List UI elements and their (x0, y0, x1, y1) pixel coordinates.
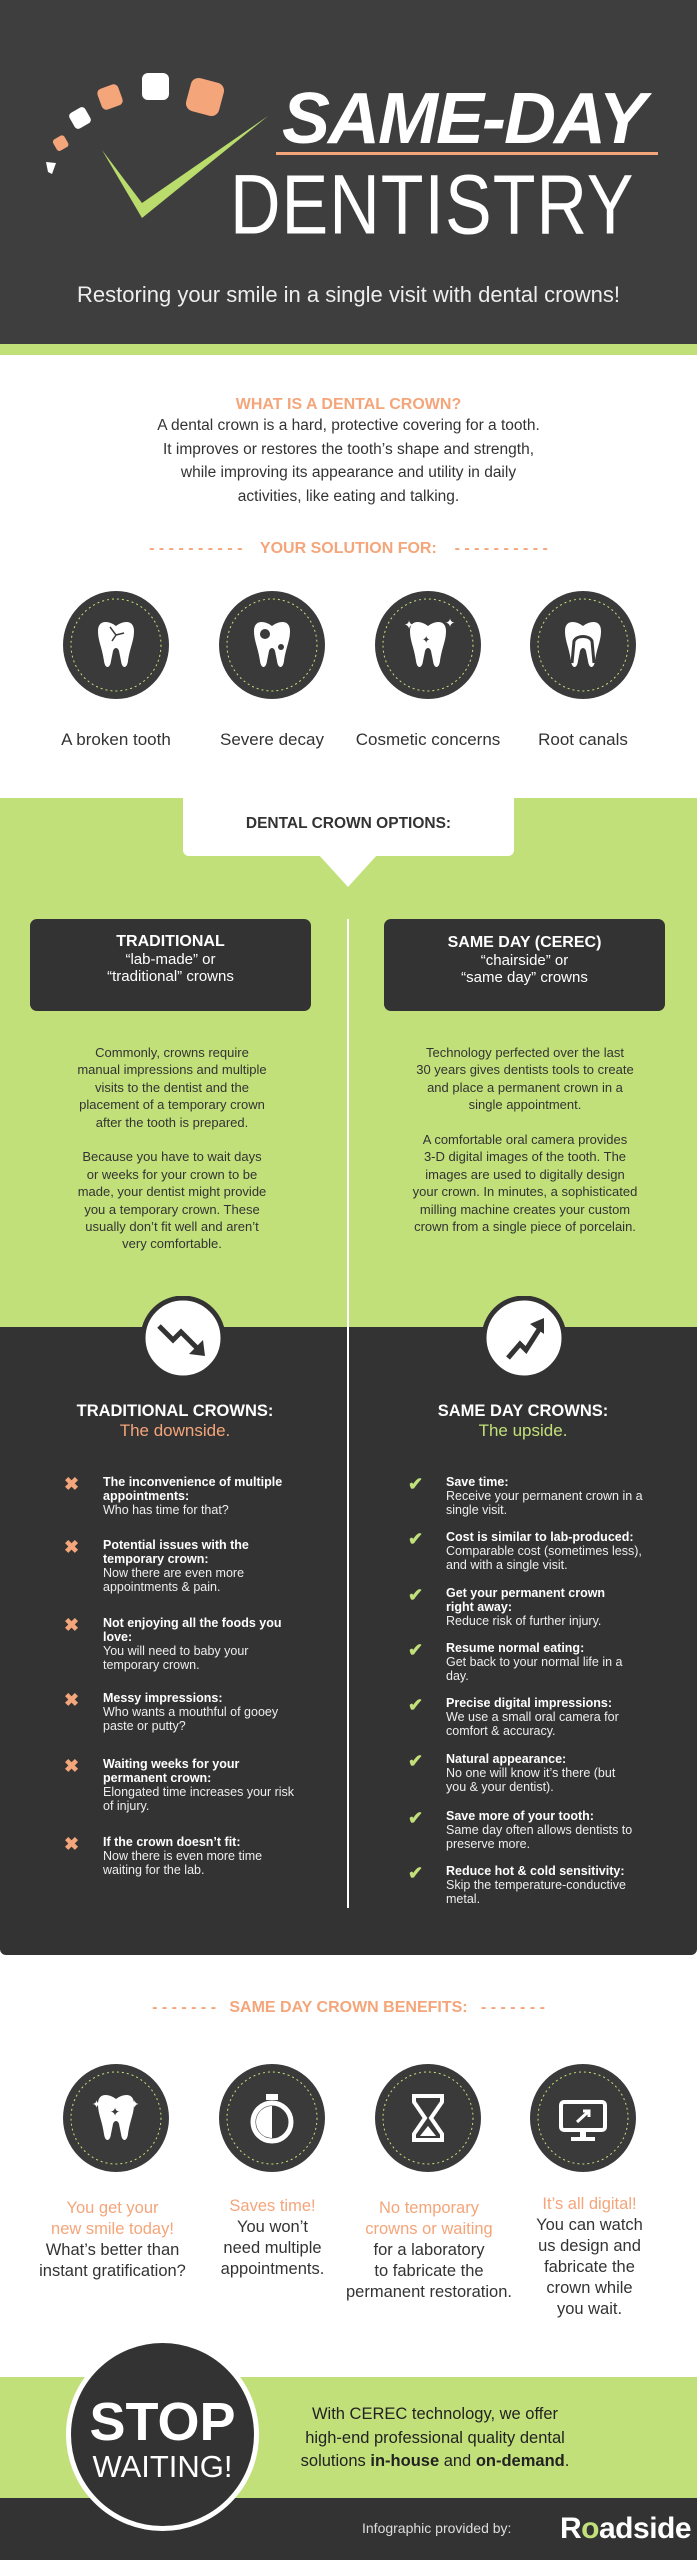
section: dental crown options (0, 798, 697, 1328)
list: downsides: ✖ (64, 1756, 79, 1776)
list: downsides: ✖ (64, 1537, 79, 1557)
what is a dental crown: activities, like eating and talking. (238, 488, 459, 504)
icon: shiny tooth (63, 2064, 169, 2172)
what is a dental crown: WHAT IS A DENTAL CROWN? (236, 396, 461, 413)
text: traditional: visits to the dentist and the (95, 1080, 249, 1095)
list: downsides: You will need to baby your temporary crown. (103, 1644, 248, 1672)
title: DENTISTRY (230, 158, 634, 252)
what is a dental crown: It improves or restores the tooth’s shape and strength, (163, 440, 534, 458)
list: upsides: Save more of your tooth: (446, 1809, 594, 1823)
icon: cosmetic: ✦ (422, 635, 430, 646)
list: upsides: ✔ (408, 1808, 423, 1828)
header (0, 0, 697, 344)
list: upsides: Get your permanent crown right away: (446, 1586, 605, 1614)
list: downsides: Messy impressions: (103, 1691, 222, 1705)
text: traditional: placement of a temporary crown (79, 1097, 265, 1112)
heading: benefits: - - - - - - - SAME DAY CROWN BENEFITS: - - - - - - - (152, 1999, 545, 2016)
text: traditional: made, your dentist might provide (78, 1184, 266, 1199)
text: traditional: very comfortable. (122, 1236, 222, 1251)
what is a dental crown (157, 396, 540, 504)
solution labels: A broken tooth (61, 730, 171, 749)
logo: roadside: Roadside (560, 2512, 691, 2545)
list: upsides: We use a small oral camera for comfort & accuracy. (446, 1710, 619, 1738)
text: same day: images are used to digitally design (425, 1167, 625, 1182)
heading: same day crowns: The upside. (479, 1421, 567, 1440)
list: upsides: Reduce hot & cold sensitivity: (446, 1864, 625, 1878)
icon: monitor (530, 2064, 636, 2172)
text: same day: 30 years gives dentists tools to create (416, 1062, 634, 1077)
text: traditional (77, 1045, 267, 1251)
benefit texts: What’s better than (46, 2241, 179, 2259)
callout: DENTAL CROWN OPTIONS: (246, 815, 451, 832)
benefit texts: appointments. (221, 2260, 324, 2278)
icon: hourglass (375, 2064, 481, 2172)
benefit texts: need multiple (223, 2239, 322, 2257)
panel: same day: “same day” crowns (461, 969, 588, 986)
benefit texts: for a laboratory (374, 2241, 484, 2259)
panel: traditional (30, 919, 311, 1011)
banner: stop waiting: high-end professional quality dental (305, 2428, 565, 2446)
list: upsides: Comparable cost (sometimes less), and with a single visit. (446, 1544, 642, 1572)
benefit icons (63, 2064, 636, 2172)
solution icons (63, 591, 636, 699)
icon: cosmetic (375, 591, 481, 699)
solution labels: Severe decay (220, 730, 324, 749)
title: SAME-DAY (282, 79, 645, 159)
text: same day: A comfortable oral camera provides (423, 1132, 627, 1147)
benefit texts: us design and (538, 2237, 641, 2255)
icon: decay (219, 591, 325, 699)
text: traditional: Because you have to wait days (82, 1149, 262, 1164)
callout (183, 798, 514, 856)
banner: stop waiting (0, 2377, 697, 2498)
icon: root canal (530, 591, 636, 699)
list: upsides: ✔ (408, 1529, 423, 1549)
benefit texts: fabricate the (544, 2258, 635, 2276)
icon: shiny tooth: ✦ (130, 2099, 139, 2111)
text: same day: 3-D digital images of the tooth. The (424, 1149, 626, 1164)
list: downsides: Now there is even more time waiting for the lab. (103, 1849, 262, 1877)
list: upsides: Save time: (446, 1475, 509, 1489)
list: downsides: ✖ (64, 1834, 79, 1854)
benefit texts: crown while (546, 2279, 633, 2297)
panel: same day (384, 919, 665, 1011)
list: downsides: Waiting weeks for your permanent crown: (103, 1757, 239, 1785)
subtitle: Restoring your smile in a single visit with dental crowns! (77, 282, 620, 307)
benefit texts: new smile today! (51, 2220, 174, 2238)
list: upsides: Same day often allows dentists to preserve more. (446, 1823, 632, 1851)
icon: cosmetic: ✦ (404, 618, 414, 632)
list: downsides: ✖ (64, 1474, 79, 1494)
text: same day: and place a permanent crown in a (427, 1080, 623, 1095)
benefit texts: No temporary (379, 2199, 479, 2217)
list: downsides: ✖ (64, 1615, 79, 1635)
list: downsides: Who has time for that? (103, 1503, 229, 1517)
list: upsides: ✔ (408, 1640, 423, 1660)
list: upsides: Skip the temperature-conductive metal. (446, 1878, 626, 1906)
list: downsides: Potential issues with the temporary crown: (103, 1538, 249, 1566)
text: same day: your crown. In minutes, a sophisticated (413, 1184, 637, 1199)
panel: traditional: “traditional” crowns (107, 968, 234, 985)
list: downsides: If the crown doesn’t fit: (103, 1835, 240, 1849)
title (230, 79, 658, 252)
list: upsides: Cost is similar to lab-produced: (446, 1530, 634, 1544)
heading: same day crowns: SAME DAY CROWNS: (438, 1402, 608, 1420)
benefit texts: to fabricate the (374, 2262, 484, 2280)
list: upsides: Resume normal eating: (446, 1641, 584, 1655)
text: traditional: usually don’t fit well and aren’t (85, 1219, 259, 1234)
icon: up arrow (483, 1296, 565, 1376)
benefit texts: You won’t (237, 2218, 308, 2236)
text: traditional: manual impressions and multiple (77, 1062, 267, 1077)
text: same day: milling machine creates your custom (420, 1202, 630, 1217)
list: upsides: Natural appearance: (446, 1752, 566, 1766)
stop circle (66, 2338, 259, 2531)
what is a dental crown: while improving its appearance and utility in daily (181, 464, 516, 481)
list: downsides: The inconvenience of multiple appointments: (103, 1475, 282, 1503)
list: upsides (408, 1474, 643, 1906)
benefit texts: instant gratification? (39, 2262, 186, 2280)
list: upsides: ✔ (408, 1863, 423, 1883)
text: same day: crown from a single piece of porcelain. (414, 1219, 636, 1234)
banner: stop waiting: With CEREC technology, we offer (312, 2405, 558, 2423)
benefit texts: you wait. (557, 2300, 622, 2318)
heading: traditional crowns: TRADITIONAL CROWNS: (77, 1402, 273, 1420)
panel: traditional: TRADITIONAL (116, 933, 225, 950)
benefit texts: You get your (66, 2199, 159, 2217)
list: upsides: No one will know it’s there (but you & your dentist). (446, 1766, 615, 1794)
heading: your solution for: - - - - - - - - - - YOUR SOLUTION FOR: - - - - - - - - - - (149, 540, 548, 557)
panel: traditional: “lab-made” or (125, 951, 216, 968)
list: downsides (64, 1474, 294, 1877)
benefit texts: You can watch (536, 2216, 643, 2234)
text: traditional: or weeks for your crown to be (87, 1167, 257, 1182)
heading: same day crowns (438, 1402, 608, 1440)
solution labels: Root canals (538, 730, 628, 749)
icon: stopwatch (219, 2064, 325, 2172)
benefit texts: Saves time! (229, 2197, 316, 2215)
footer (0, 2498, 697, 2560)
icon: cosmetic: ✦ (445, 616, 455, 630)
text: traditional: after the tooth is prepared. (96, 1115, 248, 1130)
list: downsides: ✖ (64, 1690, 79, 1710)
text: traditional: you a temporary crown. These (84, 1202, 260, 1217)
list: upsides: Receive your permanent crown in a single visit. (446, 1489, 643, 1517)
section: comparison (0, 1327, 697, 1955)
list: upsides: Get back to your normal life in a day. (446, 1655, 622, 1683)
solution labels (61, 730, 628, 749)
icon: broken tooth (63, 591, 169, 699)
text: same day: Technology perfected over the last (426, 1045, 624, 1060)
banner: stop waiting: solutions in-house and on-demand. (301, 2452, 569, 2470)
text: traditional: Commonly, crowns require (95, 1045, 249, 1060)
stop circle: STOP (89, 2392, 236, 2452)
what is a dental crown: A dental crown is a hard, protective covering for a tooth. (157, 417, 540, 434)
logo icon (46, 73, 268, 218)
heading: traditional crowns: The downside. (120, 1421, 230, 1440)
benefit texts: crowns or waiting (365, 2220, 493, 2238)
list: upsides: Precise digital impressions: (446, 1696, 612, 1710)
list: upsides: ✔ (408, 1695, 423, 1715)
icon: shiny tooth: ✦ (110, 2105, 120, 2119)
icon: shiny tooth: ✦ (92, 2099, 101, 2111)
solution labels: Cosmetic concerns (356, 730, 500, 749)
benefit texts: It’s all digital! (542, 2195, 637, 2213)
panel: same day: “chairside” or (481, 952, 568, 969)
list: downsides: Elongated time increases your risk of injury. (103, 1785, 294, 1813)
list: upsides: ✔ (408, 1585, 423, 1605)
stop circle: WAITING! (92, 2449, 233, 2484)
benefit texts (39, 2195, 643, 2318)
list: downsides: Now there are even more appointments & pain. (103, 1566, 244, 1594)
footer: Infographic provided by: (362, 2520, 511, 2536)
list: upsides: Reduce risk of further injury. (446, 1614, 601, 1628)
list: downsides: Who wants a mouthful of gooey paste or putty? (103, 1705, 278, 1733)
text: same day (412, 1045, 637, 1234)
list: upsides: ✔ (408, 1751, 423, 1771)
text: same day: single appointment. (469, 1097, 581, 1112)
list: downsides: Not enjoying all the foods you love: (103, 1616, 281, 1644)
heading: traditional crowns (76, 1402, 273, 1440)
benefit texts: permanent restoration. (346, 2283, 512, 2301)
panel: same day: SAME DAY (CEREC) (448, 934, 601, 951)
list: upsides: ✔ (408, 1474, 423, 1494)
icon: down arrow (142, 1296, 224, 1376)
